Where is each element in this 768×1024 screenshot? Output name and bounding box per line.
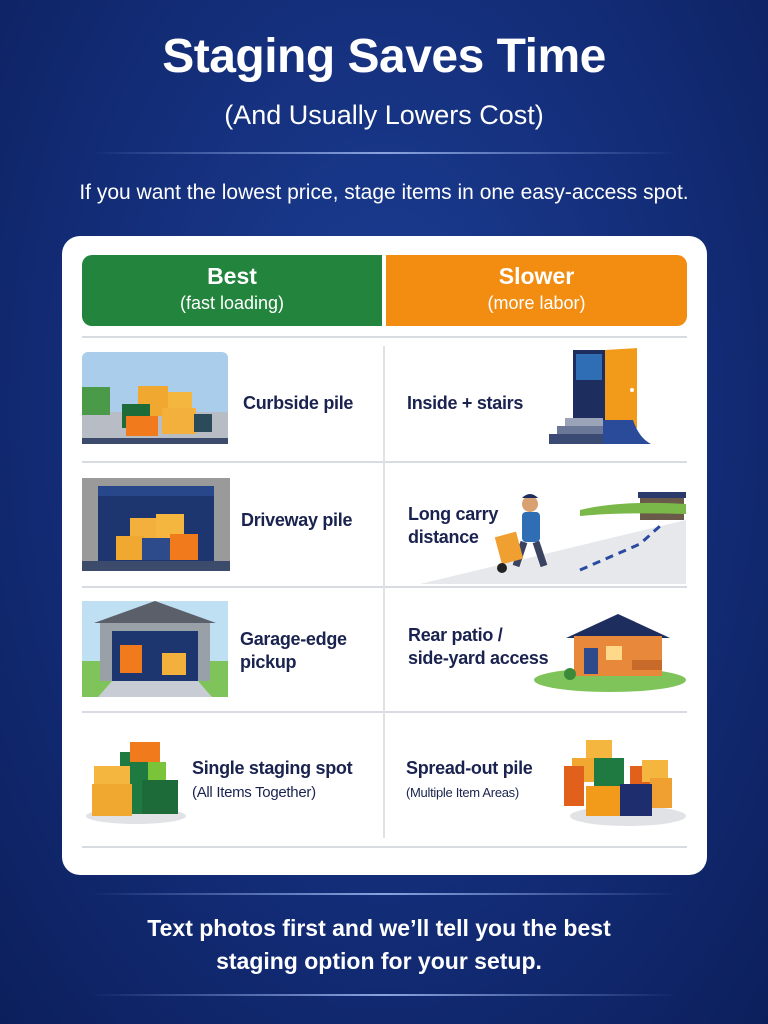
text: rear patio: [408, 625, 548, 668]
text: rear patio: Rear patio /: [408, 625, 502, 645]
icon: driveway pile: [82, 478, 230, 571]
header: slower: (more labor): [487, 293, 586, 313]
text: rear patio: side-yard access: [408, 648, 548, 668]
subtitle: (And Usually Lowers Cost): [224, 100, 544, 130]
text: inside + stairs: Inside + stairs: [407, 393, 523, 413]
text: single staging spot: (All Items Together): [192, 784, 316, 801]
text: driveway pile: Driveway pile: [241, 510, 352, 530]
text: long carry distance: [408, 504, 498, 547]
text: long carry distance: distance: [408, 527, 479, 547]
text: curbside pile: Curbside pile: [243, 393, 353, 413]
footer text: [147, 915, 611, 974]
panel: comparison card: [62, 236, 707, 875]
text: long carry distance: Long carry: [408, 504, 498, 524]
header: best: [82, 255, 382, 326]
text: garage-edge pickup: Garage-edge: [240, 629, 347, 649]
text: spread-out pile: Spread-out pile: [406, 758, 533, 778]
header: slower: Slower: [499, 263, 574, 289]
text: garage-edge pickup: pickup: [240, 652, 296, 672]
title: Staging Saves Time: [162, 30, 606, 83]
text: single staging spot: Single staging spot: [192, 758, 352, 778]
text: garage-edge pickup: [240, 629, 347, 672]
icon: single staging spot: [86, 742, 186, 824]
icon: spread-out pile: [564, 740, 686, 826]
text: single staging spot: [192, 758, 352, 801]
header: slower: [386, 255, 687, 326]
header: best: Best: [207, 263, 257, 289]
text: spread-out pile: [406, 758, 533, 800]
icon: door with stairs: [549, 348, 651, 444]
footer text: staging option for your setup.: [216, 948, 542, 974]
intro text: If you want the lowest price, stage items in one easy-access spot.: [79, 181, 689, 204]
icon: person with dolly: [420, 492, 686, 584]
icon: garage-edge pickup: [82, 601, 228, 697]
footer text: Text photos first and we’ll tell you the best: [147, 915, 611, 941]
icon: house: [534, 614, 686, 692]
header: best: (fast loading): [180, 293, 284, 313]
text: spread-out pile: (Multiple Item Areas): [406, 785, 519, 800]
icon: curbside pile: [82, 352, 228, 444]
